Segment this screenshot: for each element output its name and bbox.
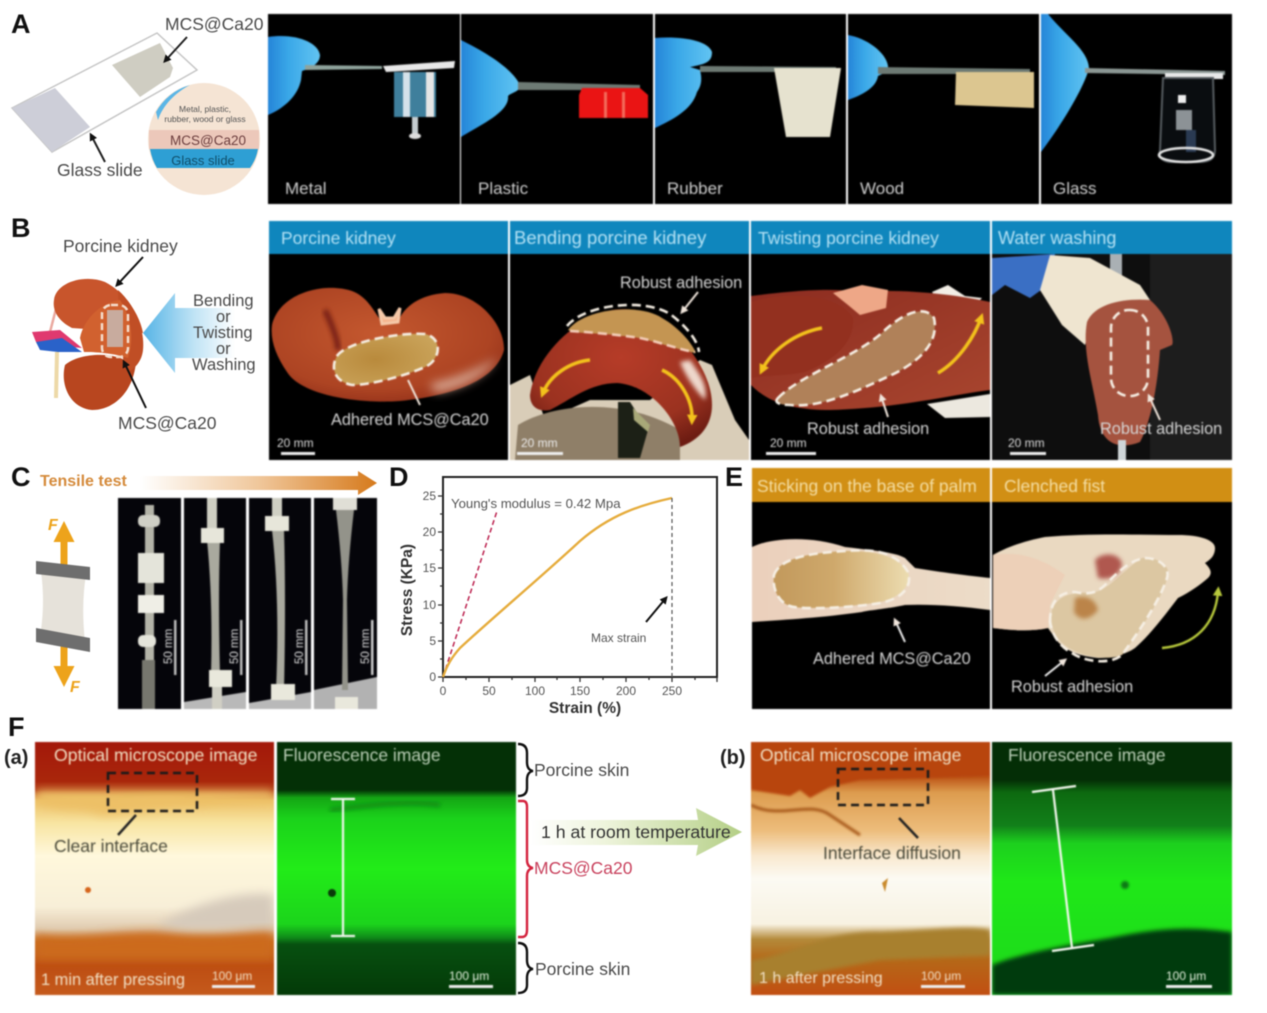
y tick labels	[423, 489, 436, 684]
max strain marker	[671, 498, 673, 677]
label: Porcine skin: Porcine skin	[535, 959, 630, 979]
MCS@Ca20 patch	[112, 43, 173, 97]
micrograph: fluorescence image, 1 h	[992, 742, 1232, 995]
y tick labels: 25	[423, 489, 436, 503]
photo: tensile stage 3	[249, 498, 311, 709]
arrow: tensile gradient	[140, 471, 377, 495]
x tick labels: 50	[482, 684, 496, 698]
label: MCS@Ca20: MCS@Ca20	[534, 858, 633, 878]
photo: Plastic: Plastic	[478, 179, 529, 198]
x tick labels: 0	[440, 684, 447, 698]
photo: Rubber	[655, 14, 846, 204]
micrograph: fluorescence image, 1 min: Fluorescence image	[283, 745, 441, 765]
micrograph: optical image, 1 min: 1 min after pressing	[41, 971, 185, 989]
y tick labels: 20	[423, 525, 436, 539]
arrow to patch	[165, 37, 187, 61]
brace: MCS@Ca20	[518, 801, 533, 937]
label: Glass slide: Glass slide	[57, 160, 143, 180]
photo: tensile stage 4	[314, 498, 377, 709]
upper lobe	[54, 279, 143, 333]
arrow: 1 h at room temperature	[530, 808, 742, 856]
photo: Glass	[1041, 14, 1232, 204]
micrograph: fluorescence image, 1 h: Fluorescence image	[1008, 745, 1166, 765]
photo: tensile stage 1: 50 mm	[163, 629, 175, 664]
photo: Bending porcine kidney: Bending porcine kidney	[514, 227, 707, 248]
photo: Twisting porcine kidney: Twisting porcine kidney	[758, 228, 939, 248]
photo: Sticking on the base of palm	[752, 468, 990, 709]
chart: stress-strain curve: Max strain	[591, 631, 646, 645]
photo: Porcine kidney: Porcine kidney	[281, 228, 396, 248]
glass slide	[12, 33, 197, 152]
label: Bending or Twisting or Washing: Washing	[192, 356, 256, 374]
schematic: porcine kidney	[32, 257, 146, 410]
photo: tensile stage 3: 50 mm	[294, 629, 306, 664]
sub-label: (a): (a)	[4, 747, 28, 769]
chart: stress-strain curve	[399, 477, 717, 717]
micrograph: fluorescence image, 1 min	[277, 742, 516, 995]
y tick labels: 0	[429, 670, 436, 684]
photo: tensile stage 2	[184, 498, 246, 709]
photo: Metal: Metal	[285, 179, 327, 198]
photo: Sticking on the base of palm: Sticking on the base of palm	[757, 476, 977, 496]
label: MCS@Ca20: MCS@Ca20	[165, 14, 264, 34]
micrograph: fluorescence image, 1 min: 100 μm	[449, 969, 489, 983]
x tick labels: 200	[616, 684, 636, 698]
photo: Porcine kidney: Adhered MCS@Ca20	[331, 411, 489, 429]
schematic: tensile specimen: F	[48, 517, 59, 534]
layered inset circle: Glass slide	[171, 153, 235, 168]
y tick labels: 5	[429, 634, 436, 648]
y tick labels: 15	[423, 561, 436, 575]
micrograph: optical image, 1 h: Interface diffusion	[823, 843, 961, 863]
heading: Tensile test: Tensile test	[40, 473, 128, 490]
kidney	[530, 309, 712, 447]
frosted end of slide	[12, 88, 90, 152]
right body	[118, 290, 143, 372]
panel label: B: B	[11, 213, 30, 243]
brace: bottom porcine skin	[518, 943, 533, 993]
photo: Water washing: Water washing	[998, 228, 1116, 248]
chart: stress-strain curve: Stress (KPa)	[399, 544, 416, 636]
panel label: A: A	[11, 9, 30, 39]
arrows	[117, 257, 143, 285]
photo: Water washing	[992, 221, 1232, 460]
photo: Twisting porcine kidney	[751, 221, 990, 460]
tissue	[510, 360, 749, 460]
stress curve	[443, 498, 672, 677]
middle lobe	[80, 300, 131, 358]
label: Bending or Twisting or Washing: Bending	[193, 292, 254, 310]
layered inset circle	[148, 83, 260, 195]
x tick labels: 100	[525, 684, 545, 698]
schematic: tensile specimen	[36, 517, 90, 696]
micrograph: optical image, 1 min	[35, 742, 274, 995]
photo: Clenched fist	[992, 468, 1232, 709]
arrow to slide	[91, 135, 105, 162]
lower lobe	[64, 352, 136, 410]
arrow: mechanical action	[143, 293, 235, 373]
layered inset circle: MCS@Ca20	[170, 133, 246, 148]
photo: Water washing: Robust adhesion	[1100, 420, 1222, 438]
photo: Twisting porcine kidney: 20 mm	[770, 436, 807, 450]
modulus line	[443, 511, 497, 677]
photo: tensile stage 1	[118, 498, 181, 709]
panel label: D: D	[389, 462, 408, 492]
photo: Sticking on the base of palm: Adhered MCS@Ca20	[813, 650, 971, 668]
schematic: tensile specimen: F	[70, 679, 81, 696]
label: Bending or Twisting or Washing	[192, 292, 256, 374]
photo: Porcine kidney	[269, 221, 508, 460]
label: Bending or Twisting or Washing: or	[216, 340, 231, 358]
x tick labels: 250	[662, 684, 682, 698]
photo: Rubber: Rubber	[667, 179, 723, 198]
brace: top porcine skin	[518, 744, 533, 796]
schematic: glass slide with MCS@Ca20	[12, 33, 197, 162]
photo: Bending porcine kidney	[510, 221, 749, 460]
layered inset circle: Metal, plastic,	[179, 104, 231, 114]
label: Bending or Twisting or Washing: Twisting	[193, 324, 253, 342]
micrograph: optical image, 1 h: 100 μm	[921, 969, 961, 983]
photo: tensile stage 2: 50 mm	[229, 629, 241, 664]
layered inset circle: rubber, wood or glass	[164, 114, 246, 124]
sub-label: (b): (b)	[720, 747, 746, 769]
axis ticks	[438, 496, 717, 682]
photo: Metal	[268, 14, 460, 204]
photo: Twisting porcine kidney: Robust adhesion	[807, 420, 929, 438]
micrograph: optical image, 1 h: Optical microscope image	[760, 745, 961, 765]
label: Porcine kidney: Porcine kidney	[63, 236, 178, 256]
chart: stress-strain curve: Strain (%)	[549, 700, 621, 717]
photo: Wood	[848, 14, 1039, 204]
photo: Glass: Glass	[1053, 179, 1096, 198]
photo: Water washing: 20 mm	[1008, 436, 1045, 450]
label: Porcine skin: Porcine skin	[534, 760, 629, 780]
photo: Plastic	[461, 14, 653, 204]
micrograph: optical image, 1 min: 100 μm	[212, 969, 252, 983]
panel label: E: E	[725, 462, 743, 492]
vessels	[50, 305, 57, 332]
photo: Bending porcine kidney: Robust adhesion	[620, 274, 742, 292]
micrograph: optical image, 1 min: Clear interface	[54, 836, 168, 856]
adhered patch	[107, 310, 123, 347]
x tick labels	[440, 684, 682, 698]
photo: tensile stage 4: 50 mm	[360, 629, 372, 664]
panel label: F: F	[8, 712, 24, 742]
y tick labels: 10	[423, 598, 436, 612]
micrograph: optical image, 1 min: Optical microscope image	[54, 745, 258, 765]
photo: Bending porcine kidney: 20 mm	[521, 436, 558, 450]
label: MCS@Ca20: MCS@Ca20	[118, 413, 217, 433]
x tick labels: 150	[570, 684, 590, 698]
micrograph: optical image, 1 h	[751, 742, 990, 995]
photo: Wood: Wood	[860, 179, 904, 198]
label: Bending or Twisting or Washing: or	[216, 308, 231, 326]
chart: stress-strain curve: Young's modulus = 0.42 Mpa	[451, 496, 621, 511]
photo: Clenched fist: Robust adhesion	[1011, 678, 1133, 696]
panel label: C: C	[11, 462, 30, 492]
micrograph: optical image, 1 h: 1 h after pressing	[759, 970, 883, 987]
photo: Clenched fist: Clenched fist	[1004, 476, 1105, 496]
micrograph: fluorescence image, 1 h: 100 μm	[1166, 969, 1206, 983]
photo: Porcine kidney: 20 mm	[277, 436, 314, 450]
patch	[568, 309, 696, 353]
arrow: 1 h at room temperature: 1 h at room temperature	[541, 822, 731, 842]
